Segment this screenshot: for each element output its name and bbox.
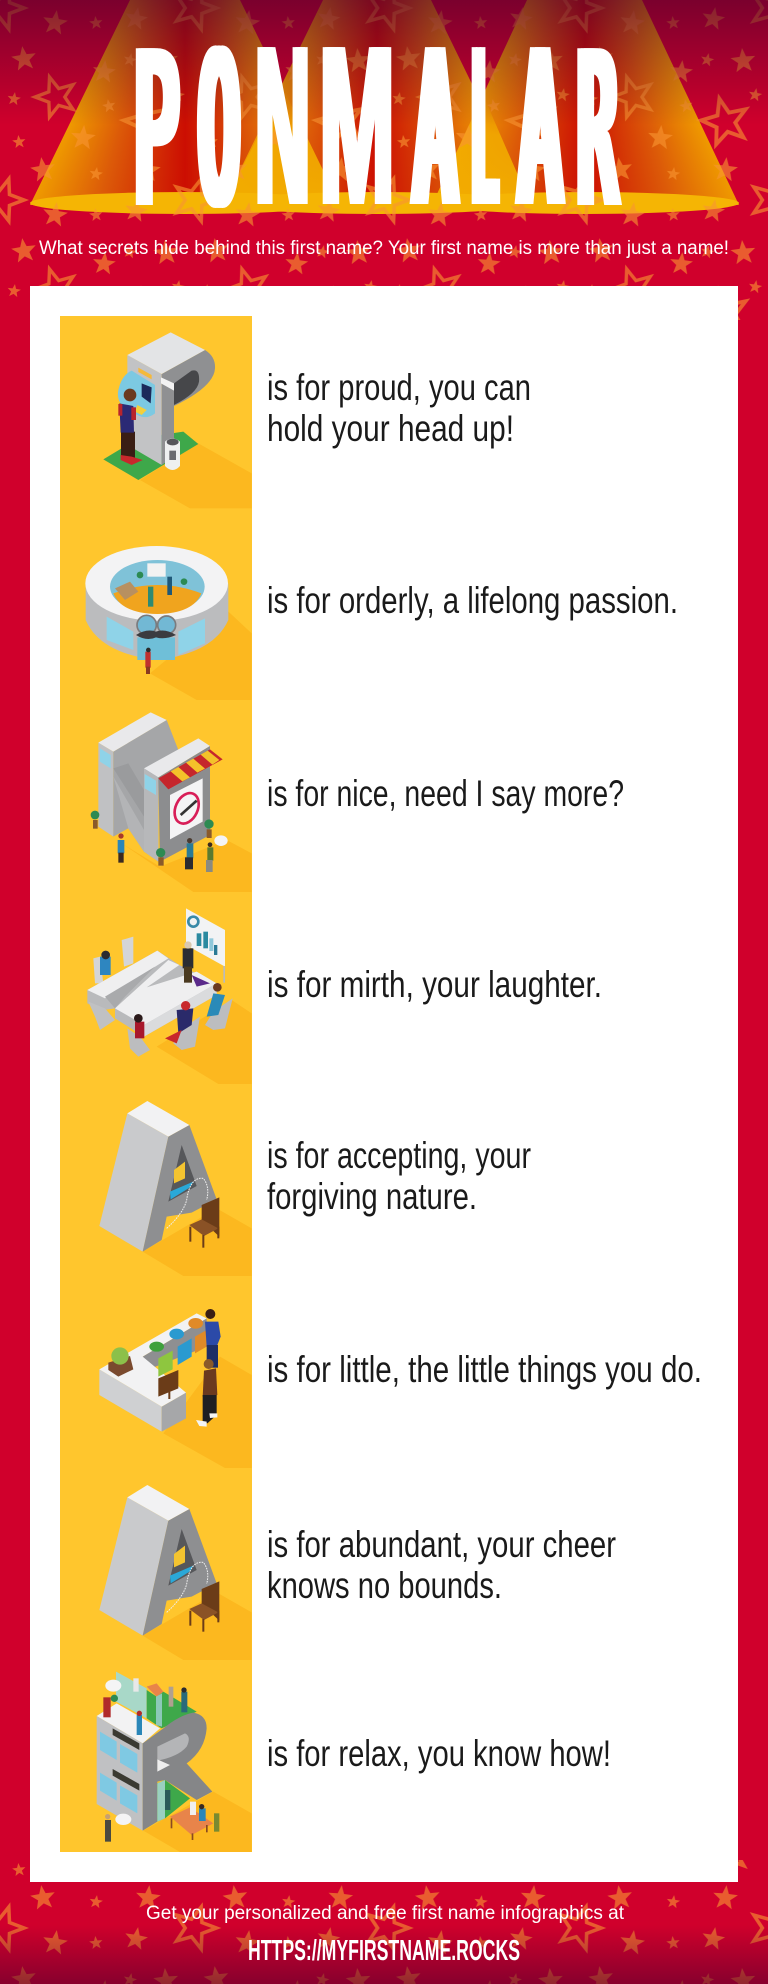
icon: letter L recycling station	[99, 1309, 252, 1468]
icon: letter P cash machine	[103, 332, 252, 508]
icon: letter N shop	[91, 712, 252, 892]
footer url: HTTPS://MYFIRSTNAME.ROCKS	[248, 1935, 520, 1967]
text: row A: forgiving nature.	[267, 1176, 477, 1217]
title: M	[319, 0, 395, 253]
panel: white content card	[30, 286, 738, 1882]
spotlight overlap left	[235, 101, 323, 194]
spotlight overlap right	[438, 108, 518, 194]
text: row N: is for nice, need I say more?	[267, 773, 624, 814]
title: P	[132, 5, 181, 256]
panel: yellow illustration strip	[60, 316, 252, 1852]
title: N	[254, 0, 310, 253]
bottom shade	[0, 1925, 768, 1984]
text: row A second: knows no bounds.	[267, 1565, 502, 1606]
title	[132, 0, 622, 256]
footer text: Get your personalized and free first name infographics at	[146, 1903, 625, 1924]
icon: letter O optician	[85, 546, 252, 700]
text: row A second	[267, 1524, 616, 1606]
title: A	[413, 0, 457, 253]
spotlight middle	[238, 0, 472, 193]
icon: letter M meeting table	[87, 908, 252, 1084]
title: L	[473, 0, 497, 253]
text: row M: is for mirth, your laughter.	[267, 964, 602, 1005]
icon: letter A second	[99, 1485, 252, 1660]
title: O	[196, 5, 241, 256]
header star pattern	[0, 0, 768, 320]
subtitle: What secrets hide behind this first name? Your first name is more than just a name!	[39, 238, 729, 259]
text: row P	[267, 367, 531, 449]
spotlight floor ellipses	[30, 192, 739, 214]
text: row A second: is for abundant, your cheer	[267, 1524, 616, 1565]
text: row P: is for proud, you can	[267, 367, 531, 408]
spotlight right	[438, 0, 739, 205]
top shade	[0, 0, 768, 125]
text: row A: is for accepting, your	[267, 1135, 531, 1176]
title: R	[576, 5, 619, 256]
spotlight left	[30, 0, 263, 205]
text: row A	[267, 1135, 531, 1217]
text: row R: is for relax, you know how!	[267, 1733, 611, 1774]
icon: letter A	[99, 1101, 252, 1276]
text: row P: hold your head up!	[267, 408, 514, 449]
title: A	[518, 0, 562, 253]
footer star pattern	[0, 1860, 768, 1984]
icon: letter R office building	[97, 1672, 252, 1852]
